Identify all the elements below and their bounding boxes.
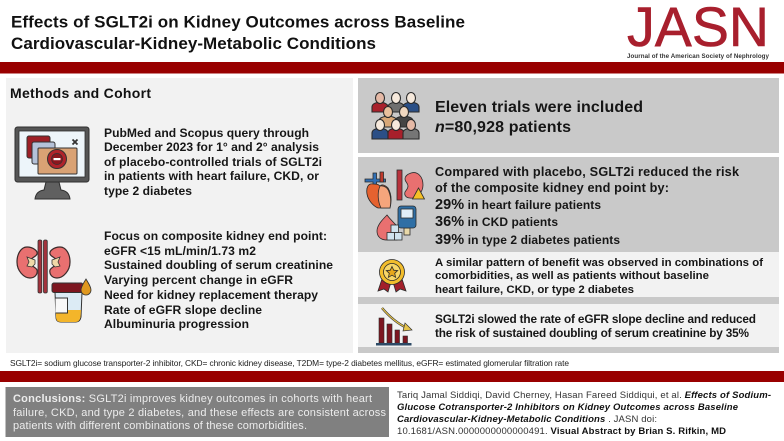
panel: risk reduction xyxy=(358,157,779,252)
icon: heart xyxy=(365,172,391,208)
text block: composite kidney end point: Rate of eGFR slope decline xyxy=(104,303,262,317)
text block: search strategy: in patients with heart failure, CKD, or xyxy=(104,169,319,183)
panel: conclusions: failure, CKD, and type 2 diabetes, and these effects are consistent across xyxy=(13,407,386,419)
panel: trials included xyxy=(358,78,779,153)
panel: conclusions: patients with different combinations of these comorbidities. xyxy=(13,420,307,432)
text block: search strategy xyxy=(104,126,322,198)
icon: glucometer and sugar xyxy=(377,206,416,240)
icon: kidneys and urine cup xyxy=(17,240,91,322)
text block: slope and creatinine xyxy=(435,312,756,340)
text block: similar pattern: heart failure, CKD, or type 2 diabetes xyxy=(435,284,634,296)
title: Cardiovascular-Kidney-Metabolic Conditions xyxy=(11,34,376,53)
text block: search strategy: December 2023 for 1° and 2° analysis xyxy=(104,140,319,154)
text block: composite end point reduction: 39% in type 2 diabetes patients xyxy=(435,232,620,248)
text block: slope and creatinine: SGLT2i slowed the rate of eGFR slope decline and reduced xyxy=(435,312,756,326)
text block: search strategy: PubMed and Scopus query through xyxy=(104,126,309,140)
icon: medal xyxy=(378,260,406,292)
panel: similar benefit xyxy=(358,252,779,304)
abbreviations footnote: SGLT2i= sodium glucose transporter-2 inhibitor, CKD= chronic kidney disease, T2DM= type-2 diabetes mellitus, eGFR= estimated glomerular filtration rate xyxy=(10,358,569,368)
citation: 10.1681/ASN.0000000000000491. Visual Abstract by Brian S. Rifkin, MD xyxy=(397,426,726,437)
panel: conclusions xyxy=(6,387,389,437)
panel heading: Methods and Cohort xyxy=(10,85,151,101)
icon: declining bar chart xyxy=(376,308,412,346)
text block: composite kidney end point: Focus on composite kidney end point: xyxy=(104,229,327,243)
text block: trial count: Eleven trials were included xyxy=(435,99,643,116)
text block: search strategy: of placebo-controlled trials of SGLT2i xyxy=(104,155,322,169)
text block: similar pattern xyxy=(435,257,763,296)
text block: composite kidney end point xyxy=(104,229,333,331)
text block: composite kidney end point: Need for kidney replacement therapy xyxy=(104,288,318,302)
title xyxy=(11,12,465,53)
text block: composite end point reduction: Compared with placebo, SGLT2i reduced the risk xyxy=(435,165,740,179)
text block: trial count xyxy=(435,99,643,136)
text block: search strategy: type 2 diabetes xyxy=(104,184,192,198)
JASN logo: Journal of the American Society of Nephrology xyxy=(627,53,770,60)
panel: eGFR slope xyxy=(358,304,779,353)
text block: similar pattern: A similar pattern of benefit was observed in combinations of xyxy=(435,257,763,269)
panel: methods and cohort xyxy=(6,78,353,353)
text block: composite end point reduction xyxy=(435,165,740,248)
text block: composite end point reduction: of the composite kidney end point by: xyxy=(435,181,669,195)
citation: Tariq Jamal Siddiqi, David Cherney, Hasan Fareed Siddiqui, et al. Effects of Sodium- xyxy=(397,390,771,401)
text block: trial count: n=80,928 patients xyxy=(435,119,571,136)
text block: composite kidney end point: Sustained doubling of serum creatinine xyxy=(104,258,333,272)
text block: composite end point reduction: 36% in CKD patients xyxy=(435,214,558,230)
icon: kidney warning xyxy=(397,170,424,200)
top red band xyxy=(0,62,784,74)
text block: composite kidney end point: Varying percent change in eGFR xyxy=(104,273,293,287)
text block: slope and creatinine: the risk of sustained doubling of serum creatinine by 35% xyxy=(435,326,750,340)
lower red band xyxy=(0,371,784,382)
citation: Glucose Cotransporter-2 Inhibitors on Kidney Outcomes across Baseline xyxy=(397,402,739,413)
icon: group of patients xyxy=(372,92,419,139)
citation xyxy=(397,390,771,437)
text block: composite kidney end point: Albuminuria progression xyxy=(104,317,249,331)
panel: conclusions: Conclusions: SGLT2i improves kidney outcomes in cohorts with heart xyxy=(13,393,372,405)
citation: Cardiovascular-Kidney-Metabolic Conditions . JASN doi: xyxy=(397,414,657,425)
text block: composite kidney end point: eGFR <15 mL/min/1.73 m2 xyxy=(104,244,256,258)
text block: composite end point reduction: 29% in heart failure patients xyxy=(435,197,601,213)
title: Effects of SGLT2i on Kidney Outcomes across Baseline xyxy=(11,12,465,32)
text block: similar pattern: comorbidities, as well as patients without baseline xyxy=(435,270,709,282)
icon: monitor with camera xyxy=(15,127,89,199)
